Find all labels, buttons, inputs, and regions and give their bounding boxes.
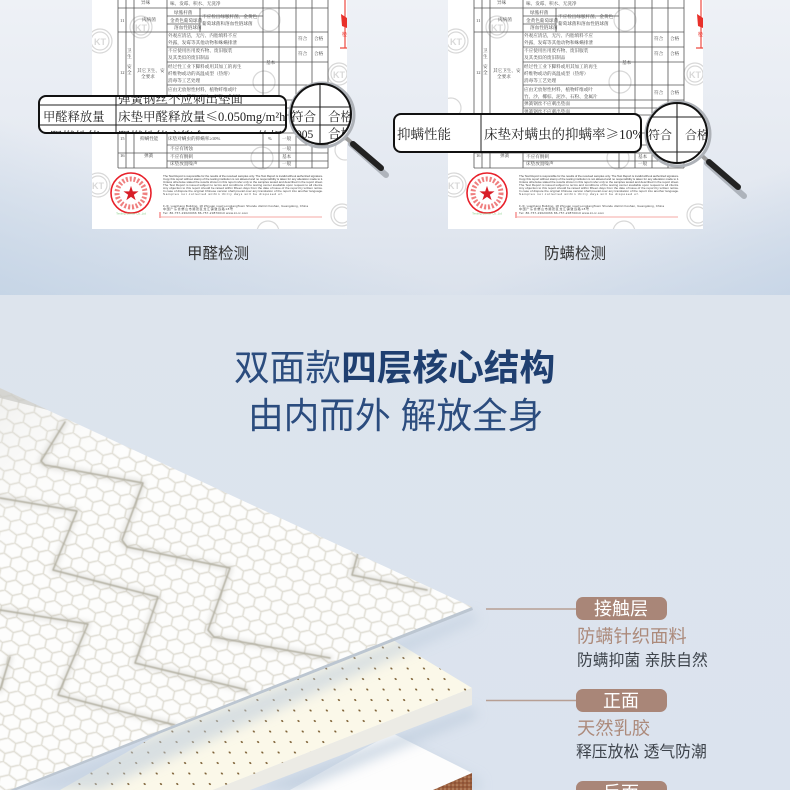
- icon: magnifier over formaldehyde result: 合格: [328, 109, 354, 124]
- background: certificate section: [0, 0, 790, 295]
- icon: magnifier over formaldehyde result: [285, 80, 386, 175]
- document page: 及其类似的废旧制品: [524, 54, 566, 61]
- document page: 合格: [670, 89, 680, 96]
- report fine print: In case of dispute the original Chinese version shall prevail over any translation of the report into another language.: [519, 189, 679, 193]
- document page: 竹、沙、椰棕、泥沙、石粉、金属片: [524, 93, 598, 100]
- document page: 竹、沙、椰棕、泥沙、石粉、金属片: [168, 93, 242, 100]
- document page: [448, 0, 703, 229]
- document page: 异味: [497, 0, 507, 6]
- document page: 合格: [314, 35, 324, 42]
- document page: 其它卫生、安: [137, 67, 165, 74]
- document page: 不应检出绿脓杆菌、金黄色: [202, 13, 258, 20]
- document page: 抑螨性能: [140, 135, 159, 142]
- document page: %: [268, 136, 272, 141]
- document page: 异味: [141, 0, 151, 6]
- document page: 符合: [298, 50, 308, 57]
- document page: 不应使用医用废弃物、废旧服装: [524, 47, 589, 54]
- report fine print: Any objection to this report should be raised within fifteen days from the date of issue of the report by written notice.: [519, 186, 679, 190]
- document page: 味、发霉、积水、无洗净: [526, 0, 577, 7]
- document page: 弹簧: [500, 152, 510, 159]
- red certification stamp: ★: [123, 186, 139, 203]
- document page: 12: [120, 70, 125, 75]
- report fine print: In case of dispute the original Chinese version shall prevail over any translation of the report into another language.: [163, 189, 323, 193]
- document page: 16: [476, 153, 481, 158]
- document page: 检: [698, 31, 703, 38]
- document page: 纤维物或动的高温成型（热熔）: [168, 70, 232, 77]
- document page: 弹簧钢丝不应刺出垫面: [168, 100, 214, 107]
- title: [234, 348, 555, 436]
- document page: 一般: [638, 160, 648, 167]
- document page: 经过性工业下脚料或用其加工的再生: [168, 63, 242, 70]
- label: front side latex: 正面: [603, 691, 639, 711]
- document page: 12: [476, 70, 481, 75]
- document page: 基本: [266, 59, 276, 66]
- document page: 基本: [638, 153, 648, 160]
- callout: anti-mite result: 床垫对螨虫的抑螨率≥10%: [484, 123, 644, 143]
- label: contact layer: 防螨针织面料: [577, 626, 687, 646]
- report fine print: [160, 174, 323, 218]
- title: 由内而外 解放全身: [248, 396, 543, 436]
- red certification stamp: Testing Center Co.,Ltd: [472, 212, 502, 216]
- callout: formaldehyde release result: 甲醛释放量: [43, 109, 104, 124]
- report fine print: Tel: 86-757-23620066 86-757-23870010 www.kt-ic.com: [519, 211, 604, 215]
- document page: 绿脓杆菌: [174, 9, 193, 16]
- document page: 一般: [282, 135, 292, 142]
- document page: 金黄色葡萄球菌: [170, 17, 203, 24]
- icon: magnifier over anti-mite result: 合格: [685, 127, 709, 142]
- report fine print: F-/F, yuanKang Building, 18 Zhiyuan road LongjiangTown Shunde district Foshan, Guangdong, China: [163, 204, 308, 208]
- callout: anti-mite result: 抑螨性能: [397, 126, 451, 142]
- document page: 卫: [483, 47, 488, 53]
- document page: 经过性工业下脚料或用其加工的再生: [524, 63, 598, 70]
- document page: 合格: [670, 50, 680, 57]
- document page: 不应有锈蚀: [170, 145, 193, 152]
- label: front side latex: 天然乳胶: [577, 718, 650, 738]
- document page: KT: [94, 37, 106, 47]
- icon: magnifier over formaldehyde result: 合格: [328, 126, 354, 141]
- callout: formaldehyde release result: 弹簧钢丝不应刺出垫面: [118, 91, 243, 106]
- report fine print: The Test Report is issued subject to terms and conditions of the testing center available upon request to all clients.: [163, 183, 323, 187]
- title: 双面款四层核心结构: [234, 348, 555, 388]
- document page: 符合: [654, 35, 664, 42]
- leader line: front side: [486, 700, 577, 702]
- document page: 全要求: [497, 73, 511, 80]
- document page: 基本: [282, 153, 292, 160]
- icon: magnifier over anti-mite result: 符合: [648, 127, 672, 142]
- document page: 不应有倒刺: [526, 153, 549, 160]
- document page: 床垫对螨虫的抑螨率≥10%: [168, 135, 220, 142]
- report fine print: Samples not collected within thirty days will be disposed of.: [519, 192, 639, 196]
- document page: 全要求: [141, 73, 155, 80]
- report fine print: Copy this report without stamp of the testing institution is not allowed and no responsibility is taken for any alteration made to it.: [163, 177, 323, 181]
- caption: formaldehyde test: 甲醛检测: [187, 244, 249, 262]
- mattress exploded layers: [0, 388, 480, 790]
- label: back side: [576, 781, 667, 790]
- document page: 弹簧: [144, 152, 154, 159]
- report fine print: Unless otherwise stated the results shown in this report refer only to the samples tested and described in the report sheet.: [163, 180, 323, 184]
- red certification stamp: [467, 173, 507, 216]
- document page: 及其类似的废旧制品: [168, 54, 210, 61]
- document page: KT: [92, 181, 104, 191]
- document page: 床垫放置噪声: [526, 160, 554, 167]
- document page: 一般: [282, 145, 292, 152]
- document page: 安: [127, 63, 132, 70]
- document page: KT: [450, 37, 462, 47]
- document page: 不应检出绿脓杆菌、金黄色: [558, 13, 614, 20]
- callout: formaldehyde release result: [38, 95, 287, 134]
- document page: 合格: [670, 35, 680, 42]
- document page: 符合: [298, 35, 308, 42]
- report fine print: 中国广东省佛山市顺德区龙江镇致远路18号: [519, 206, 589, 211]
- report fine print: Any objection to this report should be raised within fifteen days from the date of issue of the report by written notice.: [163, 186, 323, 190]
- report fine print: F-/F, yuanKang Building, 18 Zhiyuan road LongjiangTown Shunde district Foshan, Guangdong, China: [519, 204, 664, 208]
- callout: anti-mite result: [394, 114, 644, 152]
- document page: 外露，发霉等其他动物和蛛螨排泄: [524, 39, 593, 46]
- document page: 外观应清洁，无污、内胎填料不应: [524, 32, 593, 39]
- document page: 11: [476, 18, 481, 23]
- document page: 其它卫生、安: [493, 67, 521, 74]
- caption: anti-mite test: 防螨检测: [544, 244, 606, 262]
- report fine print: Samples not collected within thirty days will be disposed of.: [163, 192, 283, 196]
- background: structure section: [0, 295, 790, 790]
- document page: 肉病菌: [498, 16, 512, 23]
- icon: magnifier over formaldehyde result: 符合: [291, 109, 317, 124]
- report fine print: The Test Report is responsible for the results of the received samples only. The Test Report is invalid without authorized signature.: [519, 174, 679, 178]
- document page: KT: [135, 23, 147, 33]
- callout: formaldehyde release result: 床垫甲醛释放量≤0.050mg/m²h: [118, 107, 286, 125]
- document page: 金黄色葡萄球菌: [526, 17, 559, 24]
- document page: 15: [120, 136, 125, 141]
- document page: 肉病菌: [142, 16, 156, 23]
- document page: 味、发霉、积水、无洗净: [170, 0, 221, 7]
- document page: 全: [127, 69, 132, 75]
- document page: 弹簧钢丝不应刺出垫面: [524, 100, 570, 107]
- icon: magnifier over anti-mite result: [640, 100, 744, 196]
- layer: anti-mite knit fabric: [0, 388, 478, 790]
- document page: 符合: [654, 89, 664, 96]
- report fine print: The Test Report is issued subject to terms and conditions of the testing center available upon request to all clients.: [519, 183, 679, 187]
- document page: 不应有倒刺: [170, 153, 193, 160]
- document page: 全: [483, 69, 488, 75]
- document page: 葡萄球菌和溶血性链球菌: [558, 20, 609, 27]
- layer: natural latex: [60, 620, 478, 790]
- layer: coir base: [290, 733, 480, 790]
- document page: 11: [120, 18, 125, 23]
- report fine print: [516, 174, 679, 218]
- document page: 消毒等工艺处理: [168, 77, 201, 84]
- document page: 外露，发霉等其他动物和蛛螨排泄: [168, 39, 237, 46]
- document page: 溶血性链球菌: [174, 24, 202, 31]
- document page: 弹簧钢丝不应刺出垫面: [524, 108, 570, 115]
- callout: formaldehyde release result: 阻燃性能应符合GB 17927的规定: [118, 129, 295, 144]
- panel: formaldehyde test report: [86, 0, 355, 262]
- icon: magnifier over formaldehyde result: 005: [296, 129, 314, 141]
- document page: 绿脓杆菌: [530, 9, 549, 16]
- document page: 不应使用医用废弃物、废旧服装: [168, 47, 233, 54]
- document page: 床垫放置噪声: [170, 160, 198, 167]
- document page: KT: [333, 70, 345, 80]
- document page: KT: [689, 70, 701, 80]
- document page: 合格: [314, 50, 324, 57]
- document page: KT: [491, 23, 503, 33]
- document page: 生: [127, 53, 132, 59]
- document page: 符合: [654, 50, 664, 57]
- document page: 安: [483, 63, 488, 70]
- red certification stamp: Testing Center Co.,Ltd: [116, 212, 146, 216]
- report fine print: 中国广东省佛山市顺德区龙江镇致远路18号: [163, 206, 233, 211]
- document page: 检: [342, 31, 347, 38]
- document page: 应由无放射性材料，植物纤维或叶: [168, 86, 237, 93]
- document page: 应由无放射性材料，植物纤维或叶: [524, 86, 593, 93]
- document page: 溶血性链球菌: [530, 24, 558, 31]
- report fine print: Unless otherwise stated the results shown in this report refer only to the samples tested and described in the report sheet.: [519, 180, 679, 184]
- red certification stamp: [111, 173, 151, 216]
- label: contact layer: 接触层: [594, 599, 648, 619]
- report fine print: Tel: 86-757-23620066 86-757-23870010 www.kt-ic.com: [163, 211, 248, 215]
- panel: anti-mite test report: [441, 0, 709, 262]
- document page: 葡萄球菌和溶血性链球菌: [202, 20, 253, 27]
- document page: 一般: [282, 160, 292, 167]
- label: contact layer: 防螨抑菌 亲肤自然: [577, 652, 708, 670]
- document page: 纤维物或动的高温成型（热熔）: [524, 70, 588, 77]
- document page: 生: [483, 53, 488, 59]
- callout: formaldehyde release result: 阻燃性能: [50, 129, 100, 144]
- red certification stamp: ★: [479, 186, 495, 203]
- report fine print: Copy this report without stamp of the testing institution is not allowed and no responsibility is taken for any alteration made to it.: [519, 177, 679, 181]
- label: front side latex: 释压放松 透气防潮: [576, 743, 707, 761]
- label: contact layer: [576, 597, 708, 670]
- label: front side latex: [576, 689, 707, 761]
- document page: 消毒等工艺处理: [524, 77, 557, 84]
- document page: 外观应清洁，无污、内胎填料不应: [168, 32, 237, 39]
- document page: 16: [120, 153, 125, 158]
- document page: KT: [448, 181, 460, 191]
- leader line: contact layer: [486, 608, 577, 610]
- document page: 卫: [127, 47, 132, 53]
- report fine print: The Test Report is responsible for the results of the received samples only. The Test Report is invalid without authorized signature.: [163, 174, 323, 178]
- document page: 基本: [622, 59, 632, 66]
- document page: [92, 0, 347, 229]
